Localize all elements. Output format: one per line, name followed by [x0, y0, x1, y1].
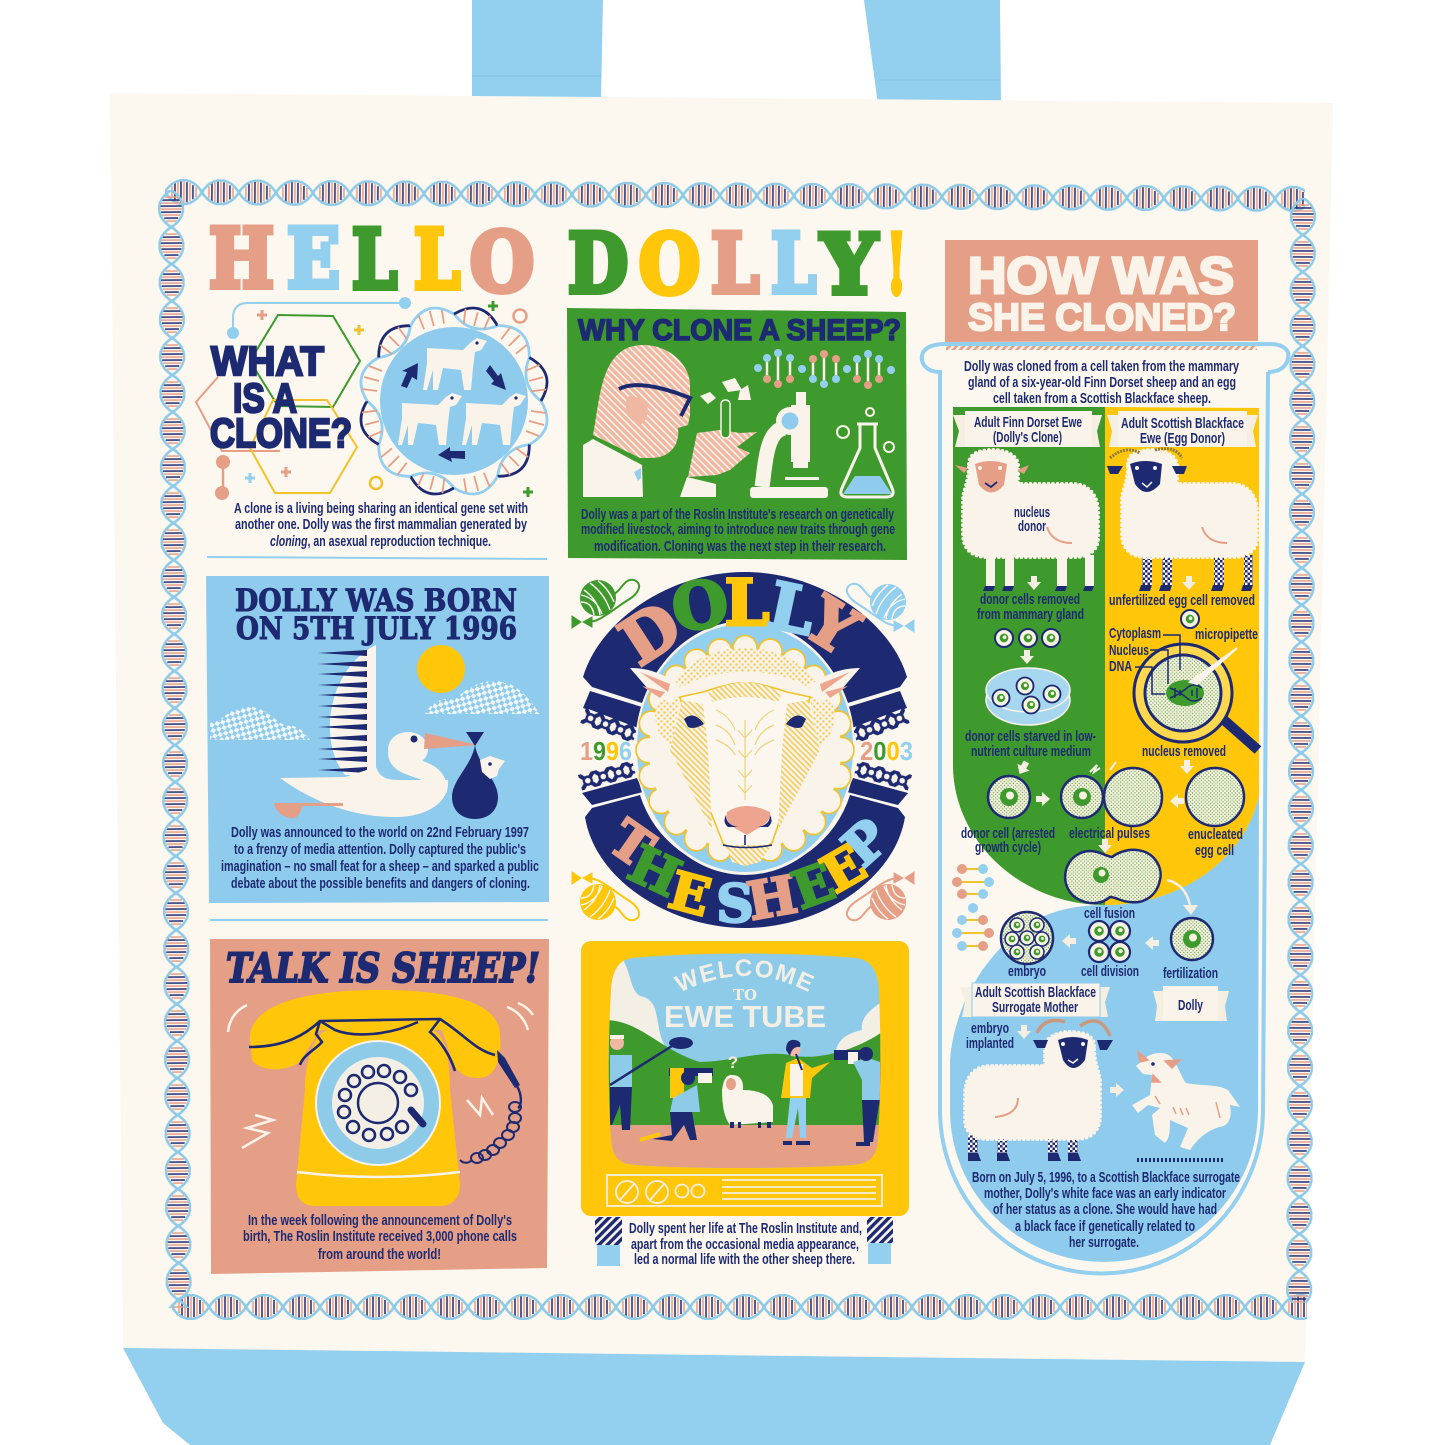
banner: Scottish Blackface ewe	[1107, 411, 1258, 447]
step: cells merged by electrical pulses	[961, 762, 1244, 859]
text: why clone	[581, 506, 895, 555]
bag handles	[472, 0, 1001, 105]
step: cells merged by electrical pulses: electrical pulses	[1069, 825, 1150, 842]
step: egg cell and magnifier: micropipette	[1195, 626, 1258, 643]
text: clone definition: A clone is a living being sharing an identical gene set with	[234, 500, 528, 517]
title: HELLO DOLLY!: O	[470, 216, 534, 311]
text: announcement: imagination – no small feat for a sheep – and sparked a public	[221, 858, 539, 875]
heading: how was she cloned?: HOW WAS	[968, 247, 1234, 304]
text: clone definition: cloning, an asexual reproduction technique.	[270, 533, 491, 550]
sheep face	[630, 621, 860, 875]
figure: camera operator	[834, 1047, 880, 1146]
text: why clone: modified livestock, aiming to introduce new traits through gene	[581, 521, 895, 538]
sign: welcome to ewe tube: TO	[733, 986, 757, 1004]
step: cells merged by electrical pulses: donor cell (arrested	[961, 825, 1055, 842]
text: announcement	[221, 824, 539, 892]
step: egg cell and magnifier	[1109, 592, 1258, 760]
test tube outline	[922, 344, 1288, 1274]
step arrows in columns	[1013, 576, 1196, 1097]
text: white face explanation	[972, 1169, 1240, 1251]
illustration: Finn Dorset sheep: donor	[1018, 518, 1046, 535]
badge ribbons	[578, 572, 912, 928]
banner: Finn Dorset ewe: Adult Finn Dorset Ewe	[974, 414, 1082, 431]
text: intro	[964, 358, 1239, 407]
label: embryo implanted: embryo	[971, 1020, 1009, 1037]
text: intro: cell taken from a Scottish Blackface sheep.	[993, 390, 1211, 407]
panel: how was she cloned	[922, 240, 1288, 1274]
heading: what is a clone?: IS A	[233, 375, 297, 421]
background: blue lower chamber	[950, 795, 1259, 1262]
figure: kneeling photographer	[640, 1068, 713, 1141]
step: cells merged by electrical pulses: growth cycle)	[975, 839, 1041, 856]
heading: Dolly was born: ON 5TH JULY 1996	[236, 611, 517, 647]
banner: Scottish Blackface ewe: Adult Scottish Blackface	[1121, 415, 1244, 432]
text: clone definition	[234, 500, 528, 550]
text: intro: gland of a six-year-old Finn Dorset sheep and an egg	[968, 374, 1236, 391]
figure: boom operator	[610, 1035, 693, 1130]
badge heading: THE SHEEP: H	[619, 833, 690, 909]
badge heading: DOLLY: L	[724, 566, 770, 641]
badge heading: THE SHEEP: S	[716, 874, 754, 935]
text: why clone: Dolly was a part of the Roslin Institute's research on genetically	[581, 506, 894, 523]
figure: sheep on set	[722, 1053, 773, 1128]
banner: surrogate mother: Surrogate Mother	[992, 999, 1078, 1016]
text: announcement: debate about the possible benefits and dangers of cloning.	[231, 875, 530, 892]
step: cells merged by electrical pulses: egg cell	[1195, 842, 1234, 859]
panel: Ewe Tube television	[581, 941, 909, 1268]
illustration: microscope	[750, 392, 828, 498]
heading: what is a clone?	[210, 338, 352, 456]
banner: Dolly: Dolly	[1178, 997, 1203, 1014]
banner: surrogate mother	[960, 983, 1110, 1017]
title: HELLO DOLLY!: !	[887, 218, 906, 313]
title: HELLO DOLLY!: D	[568, 217, 628, 312]
badge heading: THE SHEEP: P	[831, 807, 901, 879]
step: cells merged by electrical pulses: enucleated	[1188, 826, 1243, 843]
step: embryo, division, fertilization: cell fusion	[1084, 905, 1135, 922]
tv legs	[595, 1217, 893, 1266]
text: why clone: modification. Cloning was the next step in their research.	[594, 538, 886, 555]
text: intro: Dolly was cloned from a cell taken from the mammary	[964, 358, 1239, 375]
heading: talk is sheep: TALK IS SHEEP!	[226, 945, 540, 992]
badge heading: THE SHEEP: T	[598, 808, 665, 880]
text: phone calls: In the week following the announcement of Dolly's	[248, 1212, 512, 1229]
badge heading: DOLLY: O	[666, 565, 734, 648]
banner: surrogate mother: Adult Scottish Blackface	[975, 984, 1096, 1001]
tv screen scene	[608, 954, 880, 1168]
badge heading: THE SHEEP: E	[784, 851, 843, 922]
text: white face explanation: Born on July 5, 1996, to a Scottish Blackface surrogate	[972, 1169, 1240, 1186]
hexagon decorations and connector dots	[196, 297, 533, 500]
heading: Dolly was born: DOLLY WAS BORN	[235, 583, 517, 619]
title: HELLO DOLLY!: L	[352, 213, 397, 308]
title: HELLO DOLLY!	[209, 212, 906, 313]
badge years	[580, 736, 913, 766]
step: embryo, division, fertilization	[1001, 905, 1218, 982]
badge heading: DOLLY: L	[762, 568, 821, 651]
panel: talk is sheep	[210, 939, 549, 1274]
sign: welcome to ewe tube: EWE TUBE	[664, 999, 826, 1034]
tv control panel	[607, 1175, 882, 1206]
tote bag body	[110, 93, 1333, 1445]
title: HELLO DOLLY!: L	[771, 217, 816, 312]
badge heading: THE SHEEP	[598, 807, 901, 935]
heading: what is a clone?: WHAT	[211, 338, 324, 384]
illustration: sun and clouds	[210, 645, 540, 740]
panel: what is a clone	[196, 283, 566, 550]
step: embryo, division, fertilization: embryo	[1008, 963, 1046, 980]
step: donor cells	[977, 591, 1084, 647]
step: egg cell and magnifier: Cytoplasm	[1109, 625, 1161, 642]
yarn balls	[572, 580, 914, 920]
badge heading: THE SHEEP: H	[743, 864, 802, 933]
illustration: stork carrying lamb	[274, 645, 505, 819]
badge heading: THE SHEEP: E	[663, 860, 717, 929]
banner: Finn Dorset ewe	[953, 411, 1102, 447]
decoration: lamb shadow dots	[1137, 1158, 1223, 1162]
badge heading: THE SHEEP: E	[811, 833, 876, 906]
background: yellow column	[1105, 407, 1259, 905]
title: HELLO DOLLY!: O	[639, 218, 700, 313]
sign: welcome to ewe tube	[666, 959, 825, 1028]
banner: Finn Dorset ewe: (Dolly's Clone)	[993, 429, 1062, 446]
title: HELLO DOLLY!: E	[287, 212, 340, 307]
heading: how was she cloned?	[945, 240, 1258, 350]
step: donor cells: donor cells removed	[980, 591, 1080, 608]
diagram: three clones inside DNA ring	[342, 283, 566, 519]
illustration: rotary telephone	[249, 990, 521, 1206]
step: fused cell	[1065, 850, 1161, 903]
step: egg cell and magnifier: DNA	[1109, 658, 1132, 675]
badge heading: DOLLY: Y	[791, 582, 872, 671]
arrow: fusion to fertilization	[1167, 880, 1198, 915]
border: DNA helix frame	[158, 179, 1316, 1320]
panel: why clone a sheep	[567, 308, 907, 560]
text: clone definition: another one. Dolly was the first mammalian generated by	[235, 516, 527, 533]
badge heading: DOLLY: D	[607, 588, 695, 681]
label: embryo implanted	[966, 1020, 1014, 1052]
title: HELLO DOLLY!: L	[711, 217, 759, 312]
step: egg cell and magnifier: nucleus removed	[1142, 743, 1226, 760]
illustration: Finn Dorset sheep	[955, 450, 1098, 591]
sign: welcome to ewe tube: WELCOME	[673, 959, 814, 992]
decoration: molecule lollipops	[952, 864, 994, 951]
illustration: flask	[837, 408, 894, 497]
label: embryo implanted: implanted	[966, 1035, 1014, 1052]
text: white face explanation: mother, Dolly's white face was an early indicator	[984, 1185, 1226, 1202]
text: white face explanation: her surrogate.	[1069, 1234, 1139, 1251]
figure: sheep on set: ?	[728, 1053, 738, 1072]
step: embryo, division, fertilization: cell division	[1081, 963, 1139, 980]
banner: Scottish Blackface ewe: Ewe (Egg Donor)	[1140, 430, 1225, 447]
panel: born on 5th July 1996	[206, 576, 549, 903]
heading: Dolly was born	[235, 583, 517, 647]
text: announcement: Dolly was announced to the world on 22nd February 1997	[231, 824, 529, 841]
title: HELLO DOLLY!: L	[414, 213, 460, 308]
badge years: 1996	[580, 736, 632, 766]
text: white face explanation: of her status as a clone. She would have had	[993, 1201, 1217, 1218]
title: HELLO DOLLY!: Y	[820, 218, 878, 313]
text: phone calls: from around the world!	[318, 1246, 441, 1263]
text: white face explanation: a black face if genetically related to	[1015, 1218, 1195, 1235]
illustration: hand with test tube	[680, 378, 757, 497]
text: life at Roslin	[629, 1220, 862, 1268]
text: life at Roslin: apart from the occasional media appearance,	[631, 1236, 859, 1253]
step: egg cell and magnifier: Nucleus	[1109, 642, 1149, 659]
banner: Dolly	[1153, 986, 1229, 1021]
text: life at Roslin: led a normal life with the other sheep there.	[634, 1251, 855, 1268]
background: green column	[953, 407, 1105, 905]
badge years: 2003	[860, 736, 913, 766]
illustration: Scottish Blackface sheep	[1107, 449, 1257, 591]
step: petri dish: nutrient culture medium	[971, 743, 1091, 760]
text: phone calls	[243, 1212, 517, 1263]
heading: what is a clone?: CLONE?	[210, 410, 352, 456]
icons: ringing marks	[228, 1003, 533, 1148]
step: petri dish: donor cells starved in low-	[965, 728, 1096, 745]
illustration: Finn Dorset sheep: nucleus	[1014, 504, 1050, 521]
divider	[207, 557, 548, 920]
badge heading: DOLLY	[607, 565, 872, 681]
title: HELLO DOLLY!: H	[209, 212, 274, 307]
heading: why clone a sheep?: WHY CLONE A SHEEP?	[578, 314, 901, 347]
badge: Dolly the Sheep portrait	[572, 565, 914, 935]
text: announcement: to a frenzy of media attention. Dolly captured the public's	[234, 841, 526, 858]
illustration: scientist head	[583, 345, 690, 497]
illustration: surrogate sheep	[965, 1020, 1113, 1161]
step: embryo, division, fertilization: fertilization	[1163, 965, 1218, 982]
figure: presenter	[781, 1040, 830, 1145]
heading: how was she cloned?: SHE CLONED?	[968, 297, 1236, 339]
step: donor cells: from mammary gland	[977, 606, 1084, 623]
illustration: DNA lollipops	[754, 349, 895, 389]
step: petri dish	[965, 668, 1096, 760]
illustration: Dolly lamb leaping	[1132, 1052, 1240, 1150]
text: phone calls: birth, The Roslin Institute received 3,000 phone calls	[243, 1228, 517, 1245]
step: egg cell and magnifier: unfertilized egg cell removed	[1109, 592, 1255, 609]
text: life at Roslin: Dolly spent her life at The Roslin Institute and,	[629, 1220, 862, 1237]
